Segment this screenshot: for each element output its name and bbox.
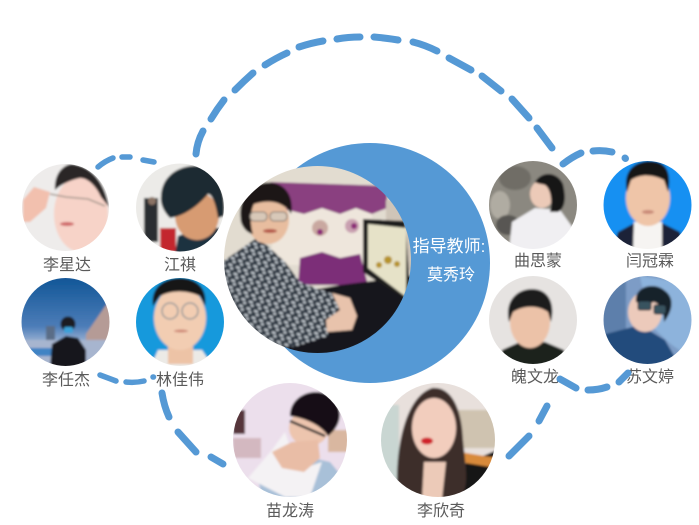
dashed arc: top left [98,157,154,167]
name: 闫冠霖: 闫冠霖 [626,252,674,270]
member: 林佳伟 [134,276,226,389]
photo: 苏文婷 [602,274,694,366]
member: 曲思蒙 [487,159,579,270]
member: 李任杰 [20,276,112,389]
member: 李星达 [20,162,112,274]
advisor name: 莫秀玲 [427,266,475,284]
member: 闫冠霖 [602,159,694,270]
name: 江祺: 江祺 [164,256,196,274]
photo: 李任杰 [20,276,112,368]
name: 李任杰: 李任杰 [42,371,90,389]
photo: 闫冠霖 [602,159,694,251]
photo: 李欣奇 [379,381,497,499]
name: 林佳伟: 林佳伟 [156,371,204,389]
photo: 魄文龙 [487,274,579,366]
blue circle [250,143,490,383]
member: 江祺 [134,162,228,274]
name: 曲思蒙: 曲思蒙 [514,252,562,270]
photo: advisor at computer [222,164,420,360]
member: 苗龙涛 [231,381,350,520]
dashed arc: top right [563,151,626,164]
photo: 李星达 [22,164,109,251]
name: 苗龙涛: 苗龙涛 [266,502,314,520]
member: 魄文龙 [487,274,579,386]
member: 苏文婷 [602,274,694,386]
name: 李星达: 李星达 [43,256,91,274]
photo: 曲思蒙 [487,159,579,251]
name: 魄文龙: 魄文龙 [511,368,559,386]
advisor title: 指导教师: [413,237,485,256]
dashed arc: top [196,37,552,154]
dashed arc: bottom right [509,373,628,456]
photo: 苗龙涛 [231,381,350,499]
photo: 江祺 [136,164,224,252]
panel: advisor [222,143,490,383]
member: 李欣奇 [379,381,497,520]
photo: 林佳伟 [134,276,226,368]
name: 苏文婷: 苏文婷 [626,368,674,386]
name: 李欣奇: 李欣奇 [417,502,465,520]
dashed arc: bottom left [100,375,223,464]
